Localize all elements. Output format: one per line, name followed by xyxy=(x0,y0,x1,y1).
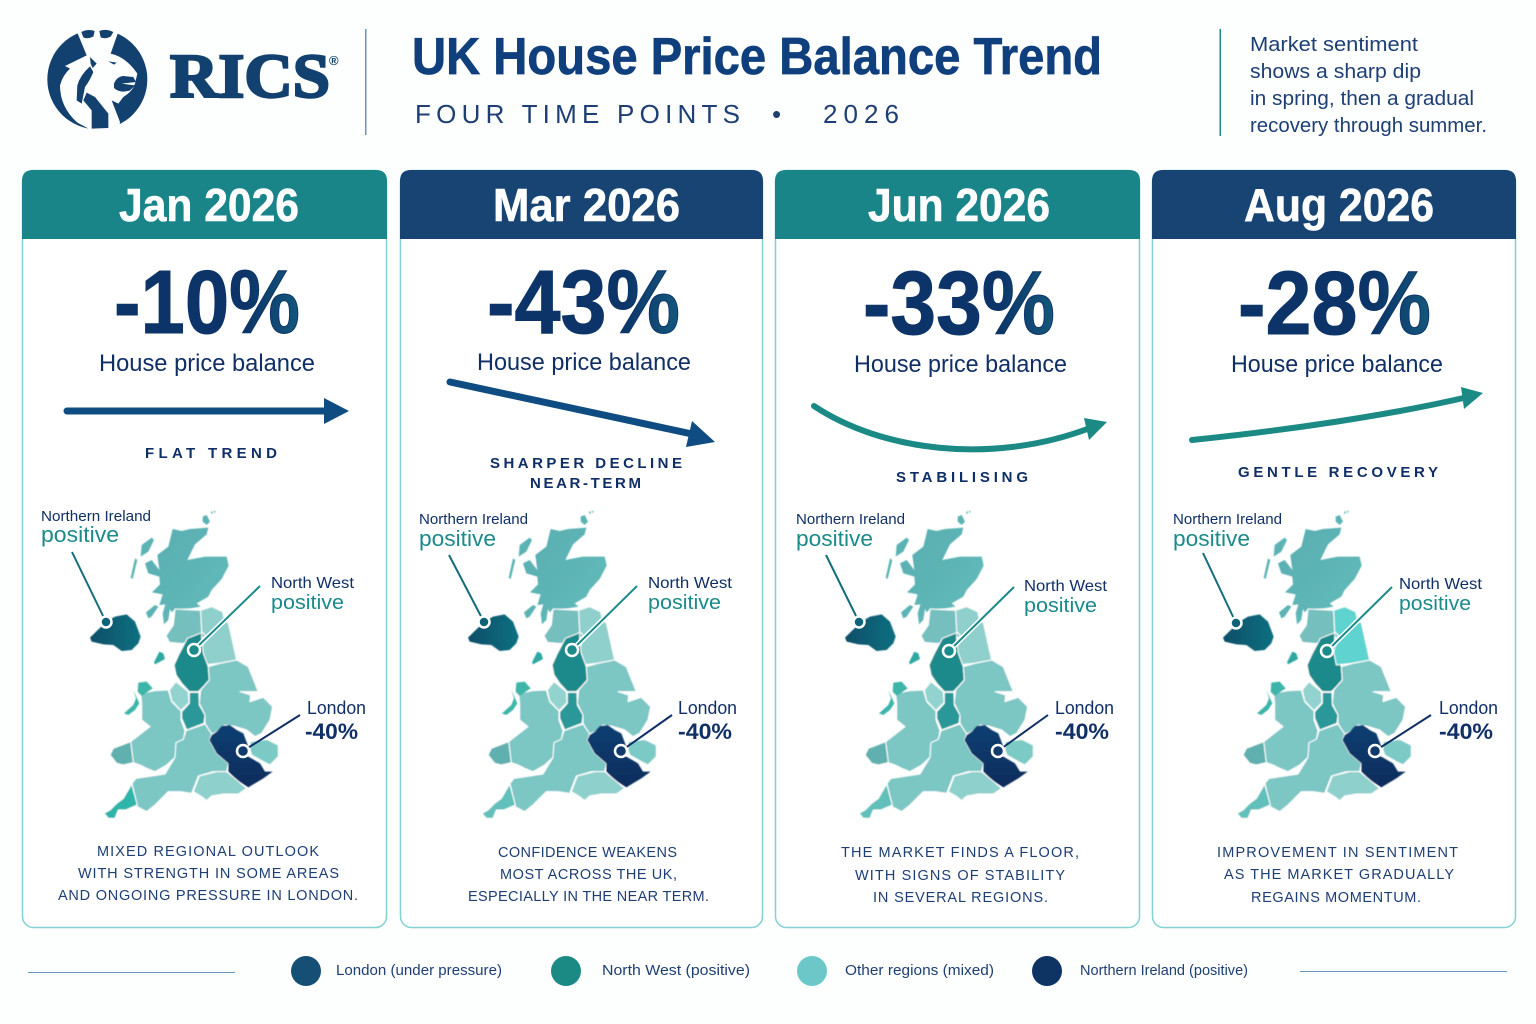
commentary: AS THE MARKET GRADUALLY xyxy=(1224,867,1454,883)
legend xyxy=(28,956,1507,986)
callout: Northern Ireland: positive xyxy=(796,526,873,551)
commentary: THE MARKET FINDS A FLOOR, xyxy=(841,845,1079,861)
callout: North West: North West xyxy=(648,575,733,592)
callout: North West xyxy=(566,575,733,656)
registered mark: ® xyxy=(329,53,339,68)
headline value: -28% xyxy=(1238,254,1431,354)
commentary xyxy=(1217,845,1458,906)
legend item: Northern Ireland xyxy=(1032,956,1248,986)
callout: London xyxy=(1369,698,1498,757)
legend item: London: London (under pressure) xyxy=(336,962,502,979)
metric label: House price balance xyxy=(854,351,1067,378)
callout: London: -40% xyxy=(1439,719,1493,744)
callout: North West xyxy=(188,575,355,656)
panel: Aug 2026 xyxy=(1152,170,1516,928)
callout: London: -40% xyxy=(305,719,358,744)
callout: North West: positive xyxy=(271,592,344,614)
callout: Northern Ireland xyxy=(1173,512,1282,628)
arrow: sharper decline xyxy=(450,382,715,447)
callout: Northern Ireland: positive xyxy=(419,526,496,551)
trend label: NEAR-TERM xyxy=(530,475,641,492)
arrow: gentle recovery xyxy=(1192,387,1483,440)
headline value: -10% xyxy=(114,253,300,353)
commentary: CONFIDENCE WEAKENS xyxy=(498,845,677,861)
commentary: MIXED REGIONAL OUTLOOK xyxy=(97,844,319,860)
callout: London xyxy=(992,698,1114,757)
callout: London: London xyxy=(1055,698,1114,718)
panel: Jun 2026 xyxy=(775,170,1140,928)
callout: North West: positive xyxy=(648,592,721,614)
card frame xyxy=(1152,170,1516,928)
callout: Northern Ireland: Northern Ireland xyxy=(419,512,528,528)
callout: North West: positive xyxy=(1399,593,1471,615)
callout: Northern Ireland: Northern Ireland xyxy=(796,512,905,528)
map: UK regions xyxy=(90,511,278,818)
subtitle: • xyxy=(772,99,781,129)
metric label: House price balance xyxy=(99,350,315,377)
legend item: North West xyxy=(551,956,750,986)
subtitle xyxy=(415,99,899,129)
legend item: London xyxy=(291,956,502,986)
summary text: Market sentiment xyxy=(1250,34,1418,56)
summary text: recovery through summer. xyxy=(1250,115,1487,137)
month heading: Jan 2026 xyxy=(119,179,299,231)
header divider left xyxy=(365,29,366,135)
callout: London xyxy=(615,698,737,757)
callout: North West: positive xyxy=(1024,595,1097,617)
commentary xyxy=(58,844,358,904)
commentary: IMPROVEMENT IN SENTIMENT xyxy=(1217,845,1458,861)
header divider right xyxy=(1220,29,1221,136)
title: UK House Price Balance Trend xyxy=(412,28,1102,86)
map: UK regions xyxy=(468,511,656,818)
panel: Mar 2026 xyxy=(400,170,763,928)
legend item: Other regions xyxy=(797,956,994,986)
callout: North West: North West xyxy=(1024,578,1108,595)
commentary: ESPECIALLY IN THE NEAR TERM. xyxy=(468,889,709,905)
arrow: flat trend xyxy=(67,398,349,424)
callout: Northern Ireland: positive xyxy=(41,522,119,547)
callout: London: -40% xyxy=(1055,719,1109,744)
legend item: Northern Ireland: Northern Ireland (positive) xyxy=(1080,962,1248,979)
map: UK regions xyxy=(845,511,1033,818)
callout: Northern Ireland: positive xyxy=(1173,526,1250,551)
callout: North West xyxy=(943,578,1108,657)
commentary: WITH SIGNS OF STABILITY xyxy=(855,868,1065,884)
commentary: AND ONGOING PRESSURE IN LONDON. xyxy=(58,888,358,904)
logo wordmark: RICS xyxy=(170,43,330,111)
card header xyxy=(1152,170,1516,239)
callout: London: London xyxy=(307,698,366,718)
commentary: WITH STRENGTH IN SOME AREAS xyxy=(78,866,339,882)
panel: Jan 2026 xyxy=(22,170,387,928)
card header xyxy=(22,170,387,239)
card header xyxy=(400,170,763,239)
callout: London xyxy=(237,698,366,757)
callout: North West xyxy=(1321,576,1483,657)
commentary xyxy=(468,845,709,905)
callout: North West: North West xyxy=(271,575,355,592)
arrow: stabilising curve xyxy=(814,406,1107,449)
card frame xyxy=(22,170,386,928)
summary text xyxy=(1250,34,1487,137)
summary text: shows a sharp dip xyxy=(1250,61,1421,83)
trend label: SHARPER DECLINE xyxy=(490,455,682,472)
subtitle: FOUR TIME POINTS xyxy=(415,99,740,129)
metric label: House price balance xyxy=(477,349,691,376)
callout: North West: North West xyxy=(1399,576,1483,593)
callout: Northern Ireland: Northern Ireland xyxy=(1173,512,1282,528)
commentary xyxy=(841,845,1079,906)
month heading: Aug 2026 xyxy=(1244,179,1434,231)
header: RICS logo xyxy=(47,27,339,130)
callout: London: London xyxy=(1439,698,1498,718)
callout: London: -40% xyxy=(678,719,732,744)
headline value: -43% xyxy=(487,253,680,353)
commentary: MOST ACROSS THE UK, xyxy=(500,867,677,883)
legend item: Other regions: Other regions (mixed) xyxy=(845,962,994,979)
commentary: IN SEVERAL REGIONS. xyxy=(873,890,1048,906)
month heading: Mar 2026 xyxy=(493,179,680,231)
logo roundel xyxy=(47,27,147,130)
callout: Northern Ireland: Northern Ireland xyxy=(41,509,151,525)
month heading: Jun 2026 xyxy=(868,179,1050,231)
legend item: North West: North West (positive) xyxy=(602,962,750,979)
card header xyxy=(775,170,1140,239)
callout: Northern Ireland xyxy=(419,512,528,628)
trend label: FLAT TREND xyxy=(145,445,277,462)
headline value: -33% xyxy=(863,254,1055,354)
callout: London: London xyxy=(678,698,737,718)
commentary: REGAINS MOMENTUM. xyxy=(1251,890,1421,906)
metric label: House price balance xyxy=(1231,351,1443,378)
summary text: in spring, then a gradual xyxy=(1250,88,1474,110)
card frame xyxy=(776,170,1140,928)
callout: Northern Ireland xyxy=(41,509,151,628)
card frame xyxy=(400,170,762,928)
trend label: STABILISING xyxy=(896,469,1028,486)
trend label xyxy=(490,455,682,492)
subtitle: 2026 xyxy=(823,99,899,129)
trend label: GENTLE RECOVERY xyxy=(1238,464,1438,481)
callout: Northern Ireland xyxy=(796,512,905,628)
map: UK regions xyxy=(1223,511,1411,818)
